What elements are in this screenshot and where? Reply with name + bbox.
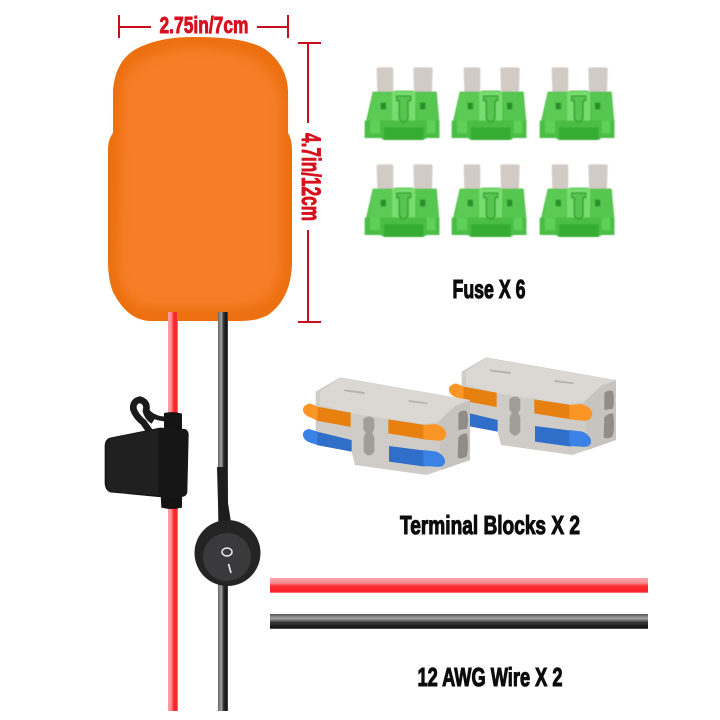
label: fuse count: Fuse X 6 [452, 274, 526, 304]
dimension: width 2.75in/7cm: 2.75in/7cm [160, 12, 248, 38]
fuses grid [365, 67, 614, 237]
dimension: height 4.7in/12cm: 4.7in/12cm [296, 133, 326, 221]
dimension: width 2.75in/7cm [119, 12, 288, 38]
terminal blocks [303, 357, 616, 475]
switch marks [222, 548, 232, 573]
inline fuse holder [105, 400, 189, 509]
red lead wire [168, 305, 178, 711]
label: wire count: 12 AWG Wire X 2 [418, 662, 562, 692]
black lead wire [218, 305, 228, 711]
orange fuse box [108, 37, 292, 321]
rocker switch [194, 467, 260, 586]
loose black wire [270, 614, 648, 629]
loose red wire [270, 578, 648, 593]
dimension: height 4.7in/12cm [296, 43, 326, 322]
label: terminal block count: Terminal Blocks X 2 [400, 510, 580, 540]
